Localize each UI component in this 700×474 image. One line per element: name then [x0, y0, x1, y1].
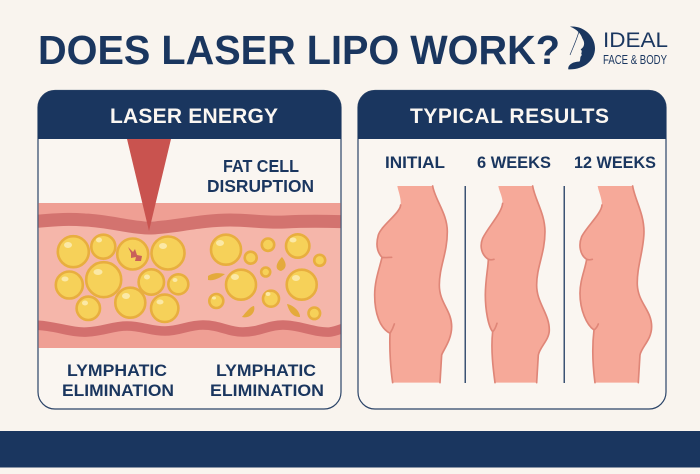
panel header — [38, 90, 341, 139]
figure: initial body — [375, 186, 452, 383]
laser beam — [127, 139, 171, 231]
panel: typical results — [358, 90, 666, 409]
label: lymphatic elimination right: ELIMINATION — [210, 381, 324, 400]
figure: 6 weeks body — [481, 186, 549, 383]
column label: 12 weeks: 12 WEEKS — [574, 154, 656, 172]
label: fat cell disruption: FAT CELL — [223, 156, 299, 176]
label: lymphatic elimination left: ELIMINATION — [62, 381, 174, 400]
label: lymphatic elimination right — [210, 361, 324, 400]
panel: laser energy — [30, 90, 350, 409]
icon: face profile — [568, 27, 595, 69]
icon: disruption spark — [128, 247, 142, 261]
label: lymphatic elimination left — [62, 361, 174, 400]
skin cross-section — [30, 203, 350, 348]
fat cells: intact cluster — [56, 235, 188, 322]
column label: initial: INITIAL — [385, 154, 445, 172]
fat cells: disrupted — [208, 234, 325, 319]
logo tagline: FACE & BODY — [603, 53, 668, 67]
logo: Ideal Face & Body — [568, 27, 668, 69]
footer bar — [0, 431, 700, 468]
figure: 12 weeks body — [580, 186, 652, 383]
logo wordmark: IDEAL — [603, 29, 668, 52]
heading: typical results: TYPICAL RESULTS — [410, 105, 609, 128]
heading: laser energy: LASER ENERGY — [110, 105, 278, 128]
label: fat cell disruption — [207, 156, 314, 196]
title: DOES LASER LIPO WORK? — [38, 27, 560, 73]
fat droplets — [208, 257, 300, 317]
label: lymphatic elimination left: LYMPHATIC — [67, 361, 167, 380]
label: lymphatic elimination right: LYMPHATIC — [216, 361, 316, 380]
panel header — [358, 90, 666, 139]
column label: 6 weeks: 6 WEEKS — [477, 154, 551, 172]
label: fat cell disruption: DISRUPTION — [207, 176, 314, 196]
